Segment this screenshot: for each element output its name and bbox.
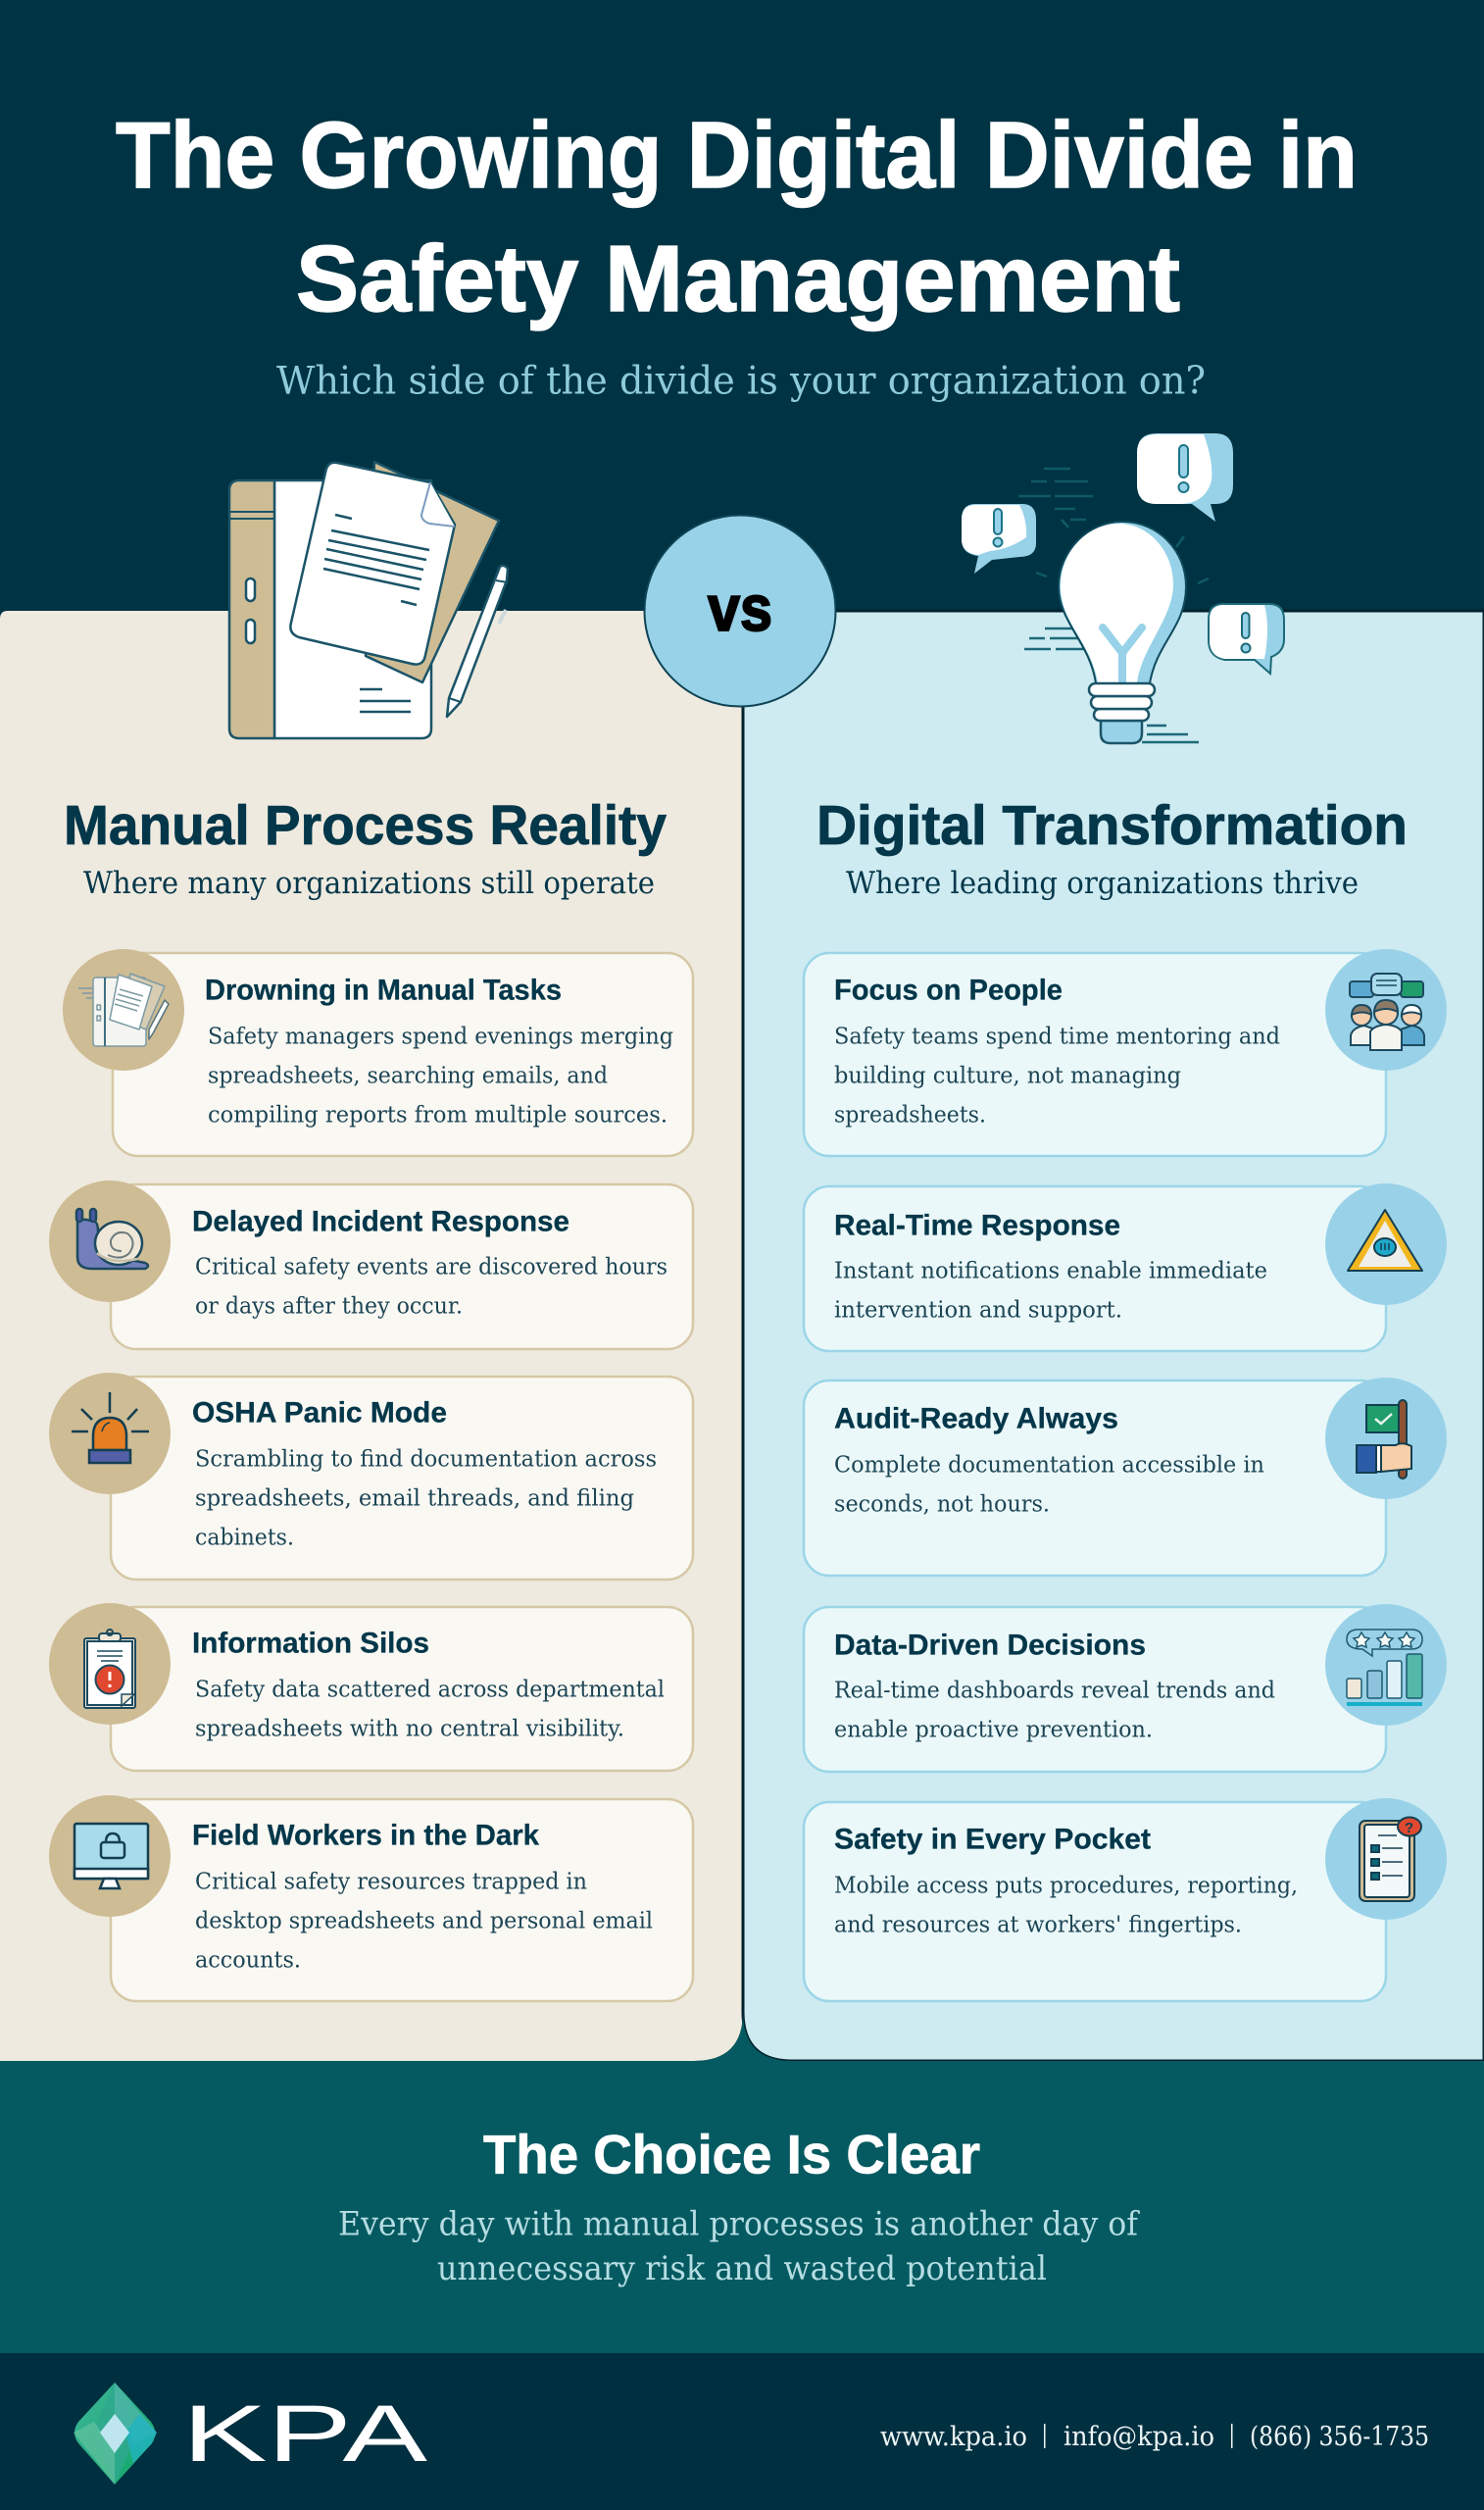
card body [195, 1255, 668, 1320]
card body: accounts. [195, 1947, 301, 1973]
card body [834, 1453, 1264, 1518]
closing statement [338, 2204, 1140, 2288]
card body: Scrambling to find documentation across [195, 1447, 657, 1473]
card title: Data-Driven Decisions [834, 1630, 1146, 1661]
card title: Safety in Every Pocket [834, 1824, 1151, 1855]
card body [834, 1679, 1275, 1743]
card title: Audit-Ready Always [834, 1402, 1118, 1435]
footer band [0, 2353, 1484, 2510]
subtitle: Which side of the divide is your organization on? [276, 359, 1206, 404]
wordmark: KPA [182, 2389, 427, 2479]
card body: desktop spreadsheets and personal email [195, 1908, 653, 1933]
contact details: www.kpa.io [880, 2422, 1027, 2452]
contact details: (866) 356-1735 [1250, 2422, 1429, 2452]
panel: digital transformation [743, 611, 1484, 2061]
header title: The Growing Digital Divide in [116, 103, 1358, 208]
closing statement: unnecessary risk and wasted potential [437, 2249, 1047, 2288]
icon: locked monitor [74, 1824, 148, 1888]
card body: spreadsheets, searching emails, and [208, 1063, 608, 1088]
card body [195, 1869, 653, 1973]
icon: hand holding checked flag [1357, 1400, 1411, 1479]
card body: Critical safety resources trapped in [195, 1869, 587, 1894]
card body: or days after they occur. [195, 1294, 463, 1320]
heading: manual process reality: Where many organizations still operate [83, 866, 655, 901]
heading: manual process reality [64, 794, 667, 901]
card body: Real-time dashboards reveal trends and [834, 1679, 1275, 1704]
card: osha panic mode [49, 1373, 693, 1580]
card body: Mobile access puts procedures, reporting, [834, 1873, 1298, 1898]
icon: clipboard alert [84, 1630, 135, 1708]
icon: binder and papers [78, 974, 169, 1046]
heading: manual process reality: Manual Process Reality [64, 794, 667, 857]
icon: siren [72, 1392, 149, 1463]
card: audit-ready always [804, 1378, 1447, 1576]
card title: Drowning in Manual Tasks [205, 975, 562, 1006]
card body [834, 1873, 1298, 1937]
heading: digital transformation [816, 794, 1408, 901]
card title: Information Silos [192, 1628, 429, 1659]
vs badge [645, 516, 835, 706]
panel: manual process [0, 611, 743, 2061]
vs badge: vs [708, 572, 772, 644]
card title: OSHA Panic Mode [192, 1396, 447, 1430]
card body [195, 1677, 665, 1741]
card body: seconds, not hours. [834, 1492, 1050, 1518]
card body: Complete documentation accessible in [834, 1453, 1264, 1479]
card: safety in every pocket [804, 1798, 1447, 2001]
heading: digital transformation: Where leading organizations thrive [846, 866, 1359, 901]
icon: right alert bubble [1209, 604, 1284, 674]
card body: Safety managers spend evenings merging [208, 1024, 673, 1049]
icon: team with speech bubbles [1350, 974, 1424, 1050]
logo: KPA [74, 2383, 427, 2485]
contact details: info@kpa.io [1064, 2422, 1214, 2452]
card body: compiling reports from multiple sources. [208, 1102, 668, 1128]
card: delayed incident response [49, 1180, 693, 1349]
icon: star rating bar chart [1347, 1630, 1422, 1706]
header title: Safety Management [296, 226, 1180, 331]
card body: and resources at workers' fingertips. [834, 1912, 1242, 1937]
card title: Focus on People [834, 975, 1063, 1006]
card: information silos [49, 1603, 693, 1771]
illustration: binder and documents [229, 462, 508, 738]
card body: spreadsheets. [834, 1102, 986, 1128]
card title: Real-Time Response [834, 1210, 1120, 1241]
card: focus on people [804, 949, 1447, 1156]
icon: phone checklist [1360, 1818, 1421, 1901]
card title: Delayed Incident Response [192, 1206, 569, 1237]
closing statement: Every day with manual processes is another day of [338, 2204, 1140, 2243]
icon: left alert bubble [962, 504, 1036, 574]
icon: warning triangle [1348, 1210, 1422, 1271]
card body: Critical safety events are discovered hours [195, 1255, 668, 1280]
card body: Safety data scattered across departmental [195, 1677, 665, 1702]
card body [208, 1024, 673, 1128]
card: data-driven decisions [804, 1604, 1447, 1772]
card body: Instant notifications enable immediate [834, 1259, 1267, 1284]
card title: Field Workers in the Dark [192, 1820, 539, 1851]
teal closing band [0, 2012, 1484, 2353]
card: drowning in manual tasks [63, 949, 693, 1156]
heading: digital transformation: Digital Transformation [816, 794, 1408, 857]
card body [195, 1447, 657, 1551]
card body: cabinets. [195, 1526, 294, 1551]
header title [116, 103, 1358, 331]
card body [834, 1024, 1280, 1128]
card body: spreadsheets with no central visibility. [195, 1716, 624, 1741]
card body: enable proactive prevention. [834, 1718, 1153, 1743]
card body: Safety teams spend time mentoring and [834, 1024, 1280, 1049]
card: field workers in the dark [49, 1795, 693, 2001]
card body: spreadsheets, email threads, and filing [195, 1486, 634, 1512]
card body: intervention and support. [834, 1298, 1122, 1324]
card body [834, 1259, 1267, 1324]
icon: phone checklist: ? [1405, 1820, 1413, 1836]
card body: building culture, not managing [834, 1063, 1181, 1088]
icon: gem mark [74, 2383, 157, 2485]
illustration: light bulb with alert bubbles [962, 433, 1284, 743]
contact details [880, 2422, 1429, 2452]
icon: large alert bubble [1137, 433, 1233, 522]
card: real-time response [804, 1183, 1447, 1351]
closing heading: The Choice Is Clear [483, 2124, 980, 2184]
icon: snail [76, 1209, 148, 1269]
